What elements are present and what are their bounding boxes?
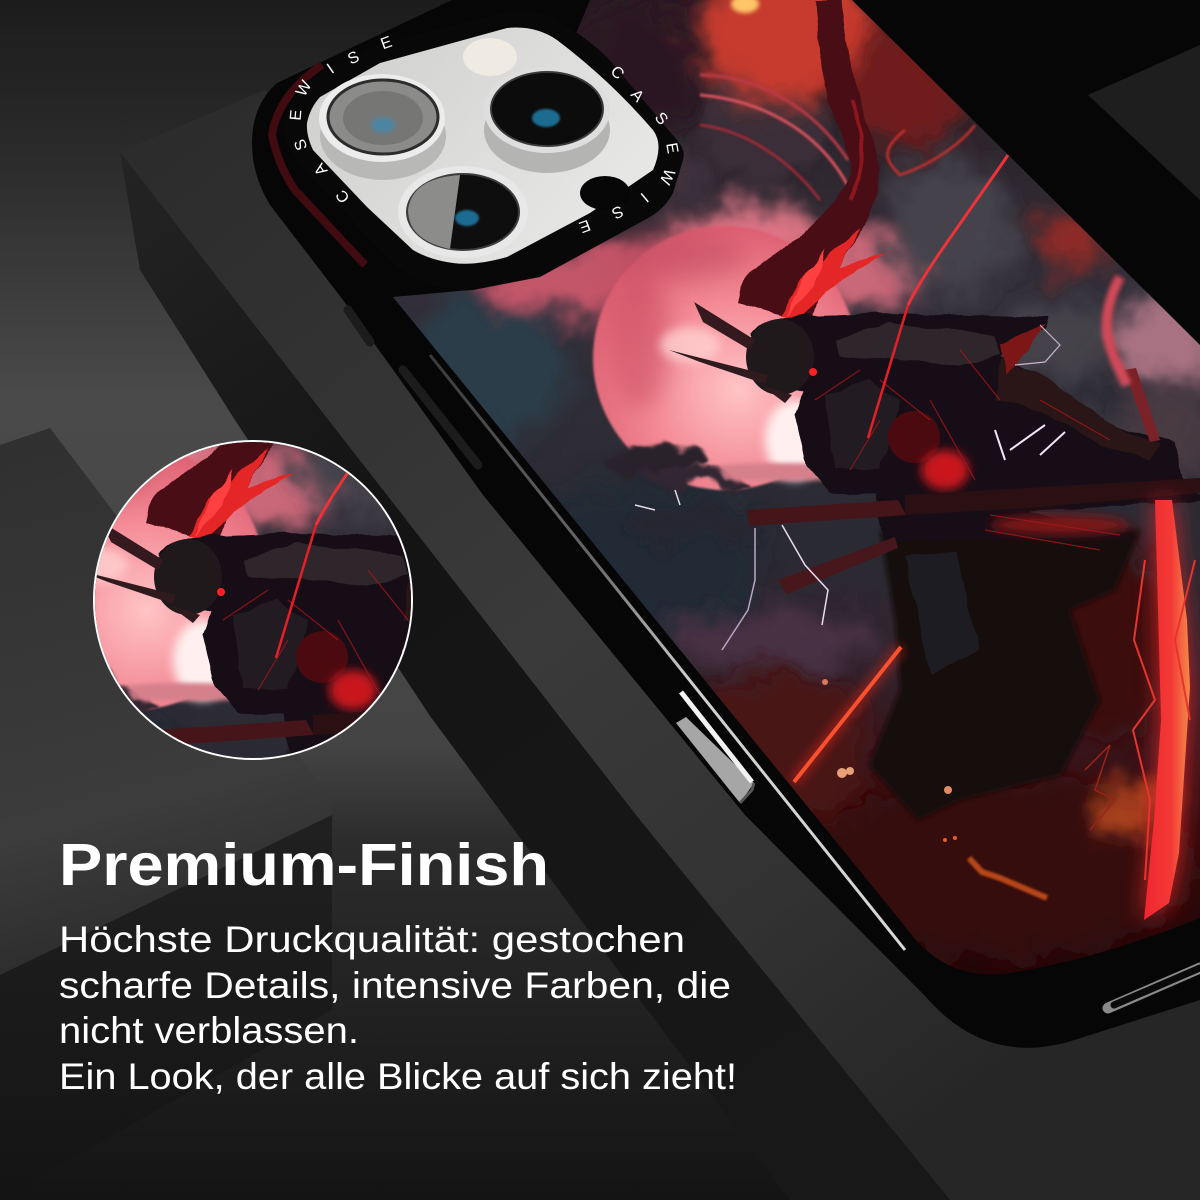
CASEWISE brand lettering: S bbox=[345, 48, 362, 68]
heading: Premium-Finish bbox=[59, 832, 549, 898]
bottom port bbox=[1108, 968, 1200, 1008]
lens 3 bbox=[398, 166, 528, 258]
body text: nicht verblassen. bbox=[59, 1010, 359, 1051]
CASEWISE brand lettering: E bbox=[288, 109, 305, 121]
case body bbox=[252, 0, 1200, 1048]
silver side button bbox=[676, 692, 754, 803]
lower left side face bbox=[0, 815, 332, 1200]
mute switch bbox=[348, 310, 370, 342]
case edge highlight bbox=[430, 355, 905, 950]
CASEWISE brand lettering: E bbox=[662, 142, 681, 155]
art strip around island bbox=[272, 65, 365, 265]
CASEWISE brand lettering: C bbox=[607, 63, 627, 83]
island frame bbox=[283, 11, 684, 290]
sensor bbox=[580, 176, 630, 210]
CASEWISE brand lettering: A bbox=[627, 86, 647, 106]
CASEWISE brand lettering: E bbox=[577, 216, 592, 235]
platform side face bbox=[120, 152, 950, 1200]
background block: upper right bbox=[852, 0, 1200, 345]
camera island bbox=[283, 11, 684, 290]
flash bbox=[463, 38, 517, 76]
side button left bbox=[403, 370, 478, 465]
body text: Höchste Druckqualität: gestochen bbox=[59, 919, 685, 960]
CASEWISE brand lettering: I bbox=[324, 61, 338, 77]
body text bbox=[59, 919, 737, 1097]
CASEWISE brand lettering: C bbox=[333, 187, 354, 206]
lens 2 bbox=[484, 67, 610, 173]
phone case bbox=[252, 0, 1200, 1048]
CASEWISE brand lettering: S bbox=[609, 202, 626, 222]
CASEWISE brand lettering: S bbox=[292, 137, 311, 152]
CASEWISE brand lettering: A bbox=[311, 160, 331, 178]
CASEWISE brand lettering: E bbox=[379, 34, 394, 53]
CASEWISE brand lettering: W bbox=[293, 77, 316, 100]
background block: lower left top bbox=[0, 428, 332, 975]
CASEWISE brand lettering: S bbox=[651, 109, 671, 129]
detail circle inset bbox=[93, 440, 413, 760]
camera plate bbox=[307, 28, 658, 264]
body text: scharfe Details, intensive Farben, die bbox=[59, 965, 731, 1006]
body text: Ein Look, der alle Blicke auf sich zieht! bbox=[59, 1056, 737, 1097]
CASEWISE brand lettering bbox=[288, 34, 681, 235]
lens 1 bbox=[319, 74, 446, 180]
CASEWISE brand lettering: I bbox=[637, 189, 651, 205]
printed screen artwork bbox=[393, 0, 1200, 974]
CASEWISE brand lettering: W bbox=[655, 166, 678, 188]
